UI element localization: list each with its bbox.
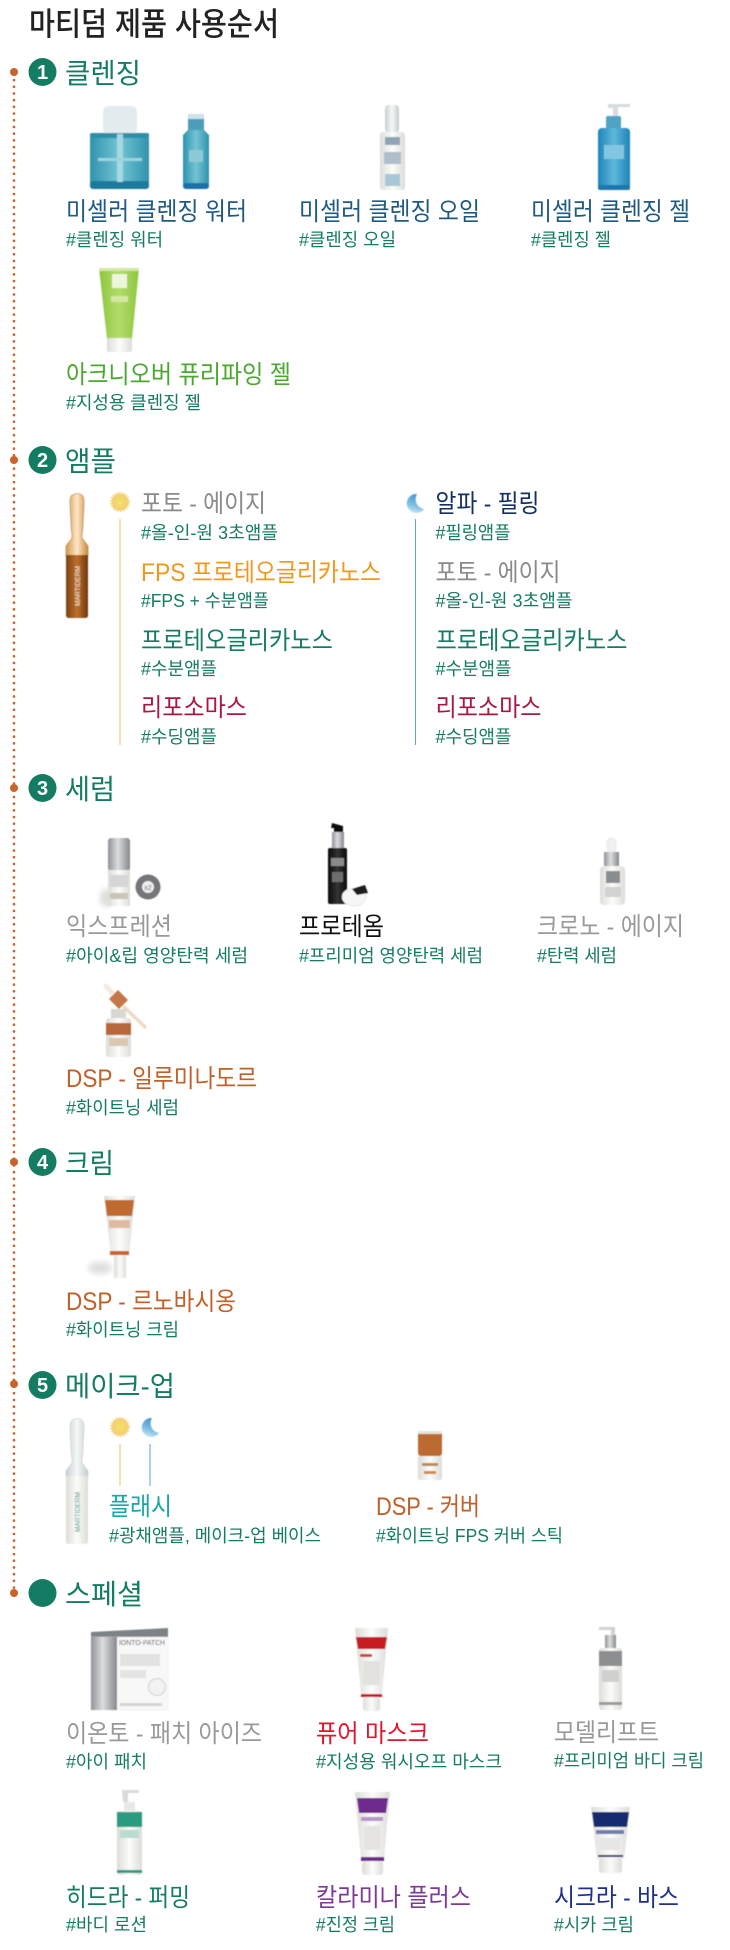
item: photo-age: #올-인-원 3초앰플 [141,523,278,543]
panel: calamina plus: 칼라미나 플러스 [316,1884,471,1912]
panel: DSP cover stick: DSP - 커버 [376,1493,480,1521]
icon: navy tube [591,1807,630,1873]
section 2 heading: ampoule: 2 [37,450,48,472]
panel: hydra firming: #바디 로션 [66,1915,147,1935]
panel: hydra firming [66,1790,190,1935]
panel: micellar cleansing water: 미셀러 클렌징 워터 [66,198,247,226]
section 6 heading: special: 스페셜 [65,1579,143,1610]
item: proteoglycanos [436,627,628,679]
icon: red tube [355,1628,388,1711]
item: liposomas: 리포소마스 [436,694,542,722]
panel: calamina plus [316,1792,471,1935]
item: FPS proteoglycanos [141,559,381,611]
icon: large and small water bottles [90,106,209,189]
section 4 heading: cream [28,1148,114,1179]
icon: pump bottle [598,104,630,190]
panel: proteum serum: #프리미엄 영양탄력 세럼 [299,946,483,966]
panel: micellar cleansing oil: 미셀러 클렌징 오일 [299,198,480,226]
icon: black pump bottle with cap [328,823,368,906]
panel: calamina plus: #진정 크림 [316,1915,395,1935]
panel: ionto-patch eyes: #아이 패치 [66,1752,147,1772]
icon: green pump bottle [117,1790,142,1875]
panel: micellar cleansing water [66,106,247,250]
item: photo-age: 포토 - 에이지 [436,559,560,587]
item: liposomas: #수딩앰플 [141,727,217,747]
icon: amber ampoule: MARTIDERM [75,566,82,606]
panel: micellar cleansing gel: #클렌징 젤 [531,230,611,250]
panel: micellar cleansing gel [531,104,690,250]
section 2 heading: ampoule: 앰플 [65,446,116,477]
icon: moon, evening [142,1418,159,1437]
icon: amber ampoule [66,494,88,618]
item: FPS proteoglycanos: #FPS + 수분앰플 [141,591,269,611]
panel: DSP renovation cream [66,1196,236,1340]
item: alpha-peeling [436,490,540,543]
panel: micellar cleansing water: #클렌징 워터 [66,230,163,250]
panel: DSP illuminador serum [66,986,257,1118]
item: liposomas: 리포소마스 [141,694,247,722]
panel: micellar cleansing gel: 미셀러 클렌징 젤 [531,198,690,226]
section 4 heading: cream: 4 [37,1152,49,1174]
panel: chrono-age serum: 크로노 - 에이지 [537,913,684,941]
icon: white flash ampoule: MARTIDERM [75,1492,82,1532]
panel: pure mask: #지성용 워시오프 마스크 [316,1752,502,1772]
item: photo-age: #올-인-원 3초앰플 [436,591,572,611]
panel: pure mask [316,1628,502,1772]
panel: flash ampoule text [109,1493,321,1546]
icon: dropper bottle [600,838,625,905]
icon: purple tube [355,1792,390,1875]
item: proteoglycanos: #수분앰플 [436,659,512,679]
panel: acne purifying gel: #지성용 클렌징 젤 [66,393,201,413]
panel: micellar cleansing oil [299,105,480,250]
item: proteoglycanos: #수분앰플 [141,659,217,679]
item: photo-age [436,559,572,611]
section 3 heading: serum [28,774,115,805]
icon: grey pump bottle [599,1627,622,1710]
section 3 heading: serum: 3 [37,778,48,800]
icon: white flash ampoule [66,1418,88,1544]
panel: modellift [554,1627,704,1771]
icon: silver bottle and x2 disc: x2 [144,885,152,892]
item: FPS proteoglycanos: FPS 프로테오글리카노스 [141,559,381,587]
panel: DSP renovation cream: DSP - 르노바시옹 [66,1288,236,1316]
section 3 heading: serum: 세럼 [65,774,115,805]
panel: pure mask: 퓨어 마스크 [316,1720,429,1748]
panel: DSP cover stick: #화이트닝 FPS 커버 스틱 [376,1526,563,1546]
item: photo-age: 포토 - 에이지 [141,490,266,518]
title: 마티덤 제품 사용순서 [29,6,279,42]
section 4 heading: cream: 크림 [65,1148,114,1179]
icon: spray bottle [380,105,405,190]
panel: flash ampoule text: #광채앰플, 메이크-업 베이스 [109,1526,321,1546]
panel: modellift: #프리미엄 바디 크림 [554,1751,704,1771]
section 5 heading: make-up: 5 [37,1375,48,1397]
panel: flash ampoule text: 플래시 [109,1493,172,1521]
icon: silver bottle and x2 disc [100,838,160,907]
panel: morning ampoule list [141,490,381,747]
panel: DSP cover stick [376,1431,563,1546]
item: liposomas [436,694,542,747]
icon: sun, morning routine [112,494,128,510]
icon: green tube [99,268,139,352]
item: proteoglycanos [141,627,333,679]
panel: cicra-vass [554,1807,679,1935]
panel: acne purifying gel: 아크니오버 퓨리파잉 젤 [66,361,291,389]
icon: moon, evening routine [407,494,424,513]
item: proteoglycanos: 프로테오글리카노스 [436,627,628,655]
icon: orange and white tube [88,1196,135,1278]
panel: proteum serum [299,823,483,966]
icon: patch box: IONTO-PATCH [119,1640,165,1647]
icon: sun, morning [112,1418,128,1436]
panel: cicra-vass: 시크라 - 바스 [554,1884,679,1912]
panel: expression serum: 익스프레션 [66,913,172,941]
panel: DSP illuminador serum: #화이트닝 세럼 [66,1098,179,1118]
item: liposomas [141,694,247,747]
panel: DSP renovation cream: #화이트닝 크림 [66,1320,179,1340]
panel: chrono-age serum [537,838,684,966]
section 2 heading: ampoule [28,446,116,477]
icon: dropper with copper collar [106,986,145,1057]
panel: hydra firming: 히드라 - 퍼밍 [66,1884,190,1912]
dotted timeline [10,68,18,1597]
panel: expression serum: #아이&립 영양탄력 세럼 [66,946,248,966]
section 5 heading: make-up: 메이크-업 [65,1371,175,1402]
panel: ionto-patch eyes: 이온토 - 패치 아이즈 [66,1720,262,1748]
icon: cover stick [418,1431,442,1480]
panel: modellift: 모델리프트 [554,1719,659,1747]
panel: chrono-age serum: #탄력 세럼 [537,946,617,966]
section 1 heading: cleansing [28,58,141,89]
section 1 heading: cleansing: 1 [37,62,48,84]
item: liposomas: #수딩앰플 [436,727,512,747]
panel: expression serum [66,838,248,966]
item: proteoglycanos: 프로테오글리카노스 [141,627,333,655]
item: photo-age [141,490,278,543]
panel: proteum serum: 프로테옴 [299,913,384,941]
panel: acne purifying gel [66,268,291,413]
panel: micellar cleansing oil: #클렌징 오일 [299,230,396,250]
section 6 heading: special [28,1579,143,1610]
panel: cicra-vass: #시카 크림 [554,1915,634,1935]
panel: DSP illuminador serum: DSP - 일루미나도르 [66,1065,257,1093]
panel: evening ampoule list [436,490,628,747]
panel: ionto-patch eyes [66,1628,262,1772]
icon: patch box [91,1628,168,1710]
section 1 heading: cleansing: 클렌징 [65,58,141,89]
item: alpha-peeling: 알파 - 필링 [436,490,540,518]
item: alpha-peeling: #필링앰플 [436,523,510,543]
